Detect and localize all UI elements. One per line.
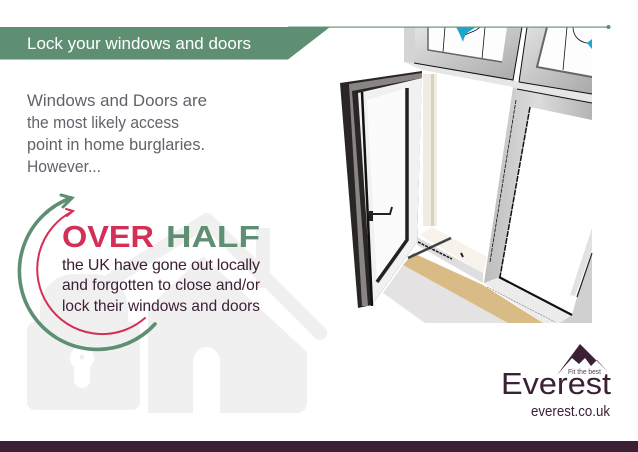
intro text: Windows and Doors are bbox=[27, 91, 207, 110]
intro text: the most likely access bbox=[27, 113, 179, 132]
illustration: open casement window bbox=[340, 27, 592, 323]
banner heading: Lock your windows and doors bbox=[27, 34, 251, 53]
statistic headline bbox=[62, 219, 260, 254]
glass panes bbox=[428, 27, 507, 62]
timber sill bbox=[403, 253, 543, 323]
stained glass leading bbox=[443, 27, 592, 70]
footer bar bbox=[0, 441, 638, 452]
lower frame bbox=[484, 277, 572, 323]
statistic headline: OVER bbox=[62, 219, 154, 254]
statistic headline: HALF bbox=[166, 219, 260, 254]
circular arrows bbox=[19, 195, 155, 349]
banner heading bbox=[0, 27, 330, 60]
intro text bbox=[27, 91, 207, 176]
top rule with end dot bbox=[288, 25, 610, 29]
opened sash bbox=[340, 71, 422, 308]
statistic description: and forgotten to close and/or bbox=[62, 277, 261, 294]
wall below sill bbox=[383, 265, 508, 323]
statistic description: the UK have gone out locally bbox=[62, 257, 260, 274]
Everest logo bbox=[501, 344, 611, 401]
reveal and inner sill bbox=[423, 74, 437, 226]
statistic description bbox=[62, 257, 261, 315]
frame shadow lines bbox=[414, 27, 592, 277]
sash handle bbox=[371, 207, 392, 214]
window frame upper bbox=[404, 27, 415, 63]
website address: everest.co.uk bbox=[531, 404, 611, 420]
statistic description: lock their windows and doors bbox=[62, 298, 260, 315]
intro text: However... bbox=[27, 157, 101, 176]
icon: house and padlock watermark bbox=[27, 220, 320, 413]
window stay arm bbox=[408, 238, 451, 258]
intro text: point in home burglaries. bbox=[27, 135, 205, 154]
Everest logo: Fit the best bbox=[568, 367, 602, 376]
Everest logo: Everest bbox=[501, 366, 611, 401]
